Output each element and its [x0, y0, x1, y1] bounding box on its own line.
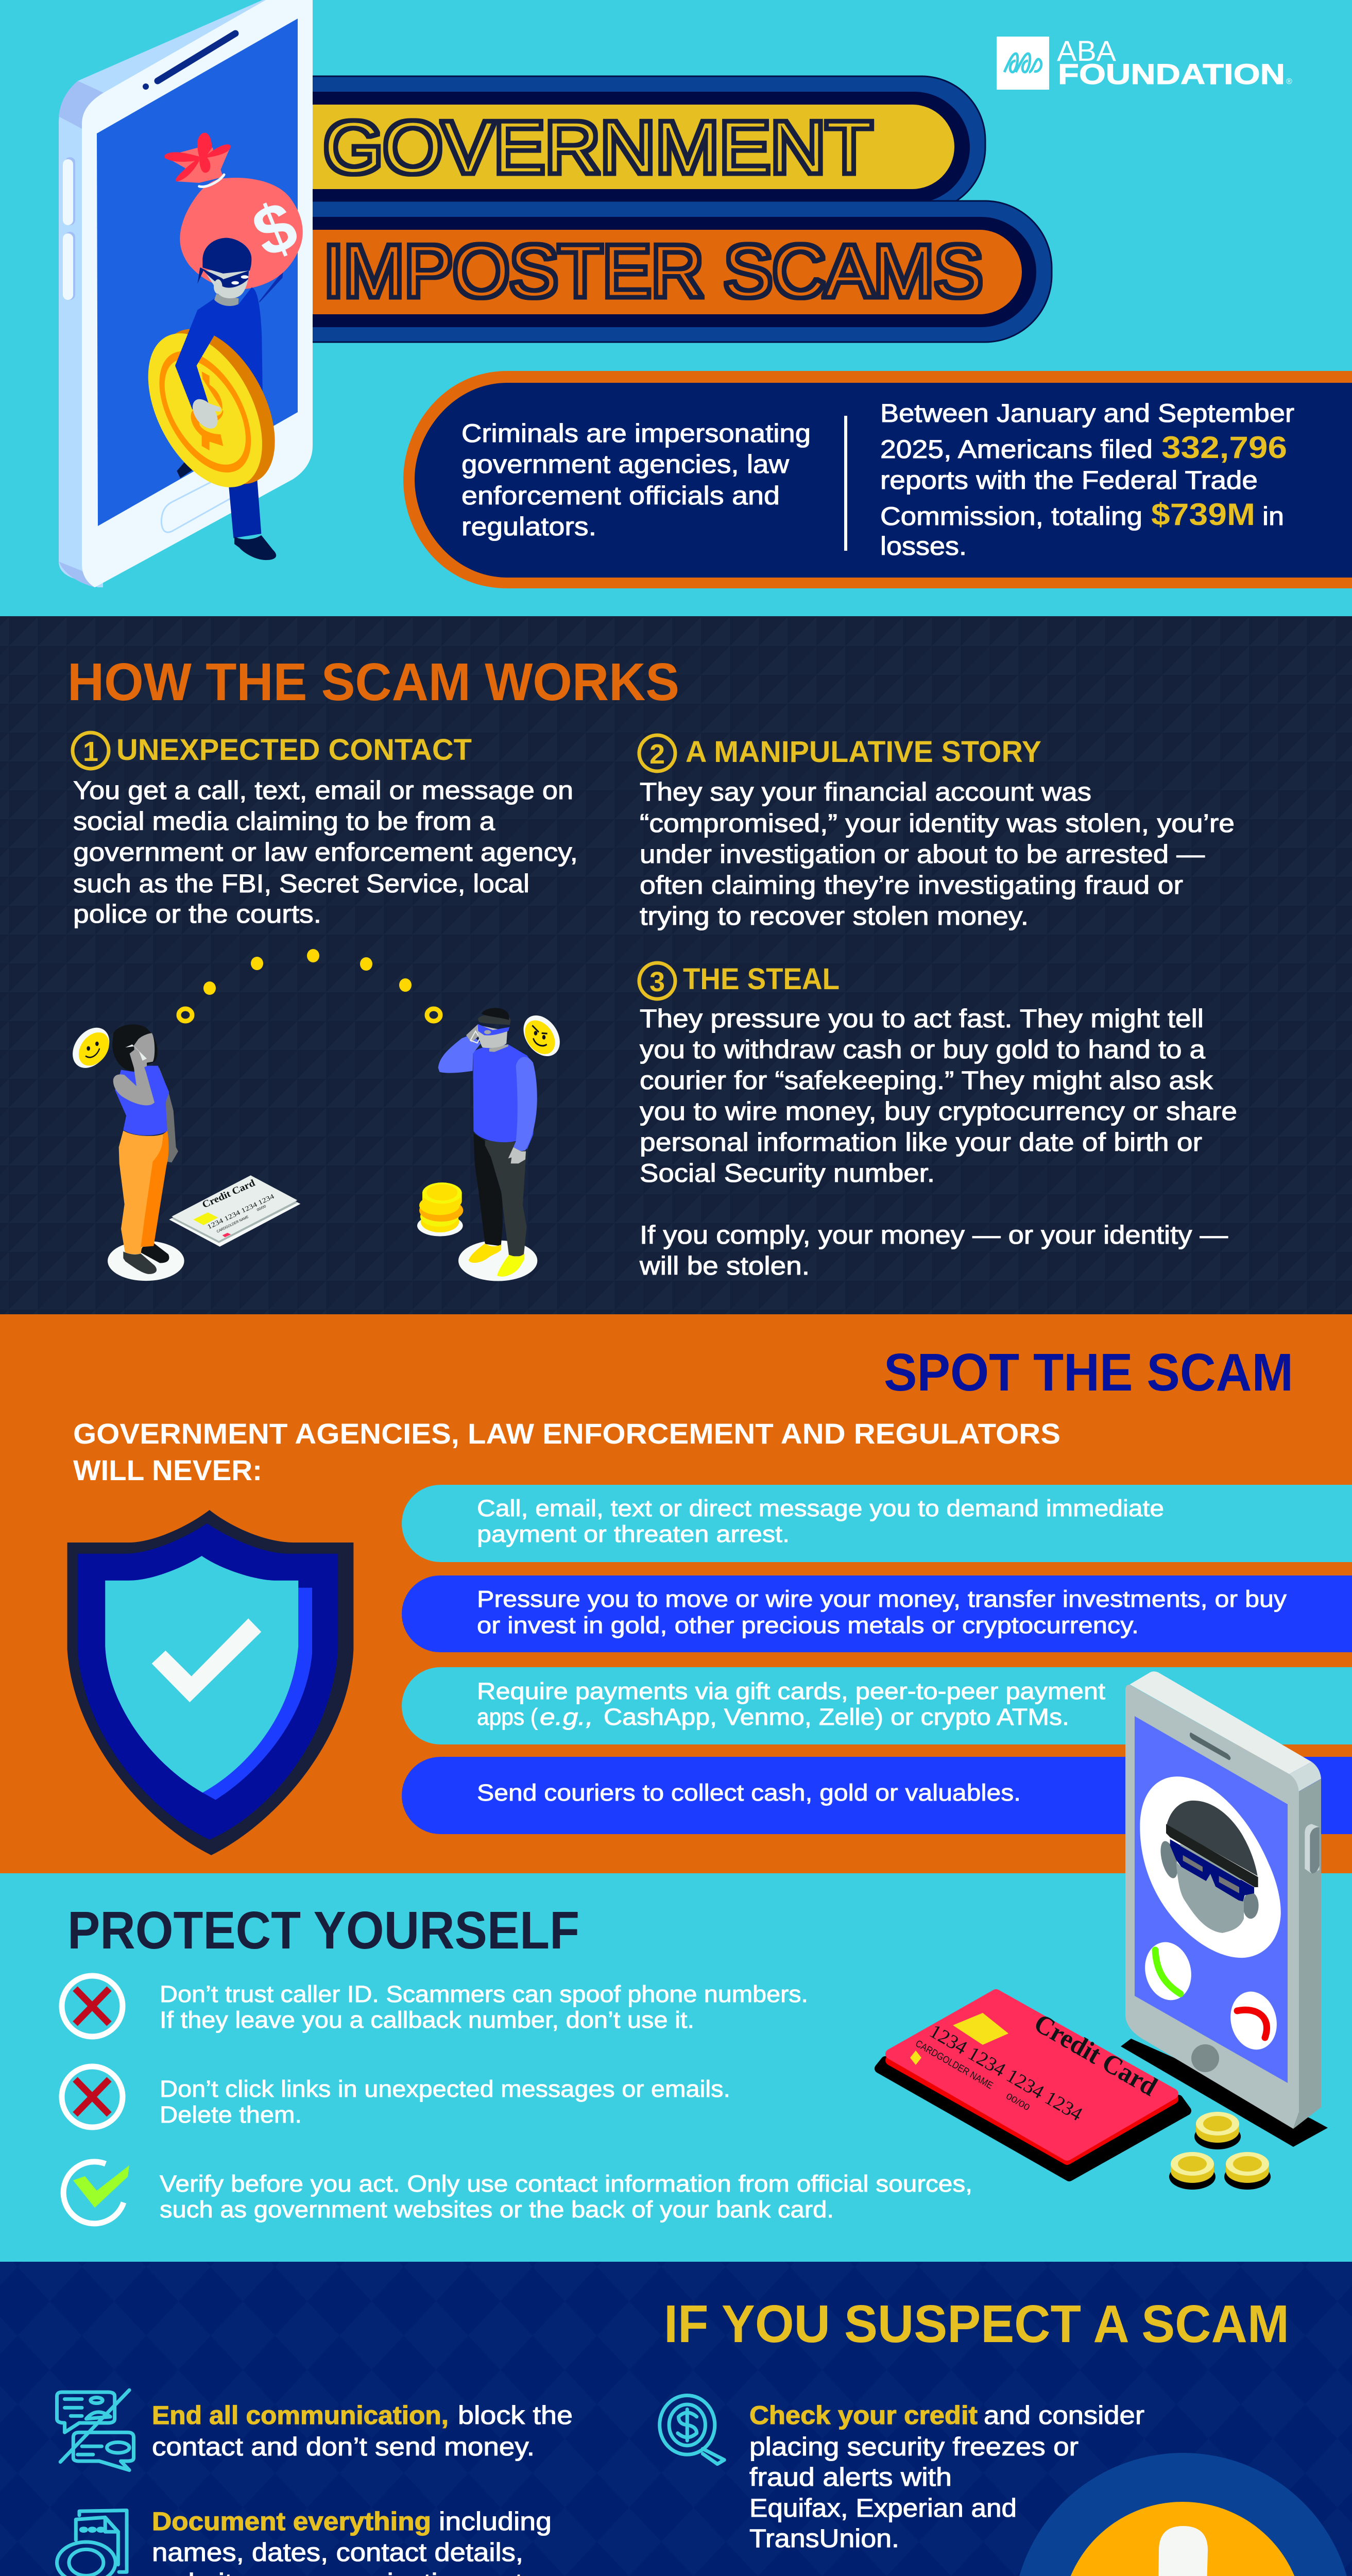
pill: call, email, text: Call, email, text or direct message you to demand immediate — [477, 1495, 1164, 1521]
pill: require payments: CashApp, Venmo, Zelle) or crypto ATMs. — [604, 1704, 1069, 1730]
text: statistics: 2025, Americans filed — [880, 435, 1153, 464]
illustration: magnifier with exclamation mark — [1013, 2453, 1352, 2576]
text: credit card details: 1234 1234 1234 1234 — [926, 2020, 1086, 2125]
text: document everything: Document everything — [152, 2507, 431, 2536]
step 3: the steal: you to wire money, buy cryptocurrency or share — [640, 1097, 1237, 1126]
pill: require payments: apps ( — [477, 1704, 538, 1730]
logo: ABA Foundation: FOUNDATION — [1058, 58, 1285, 90]
step 1: unexpected contact: government or law enforcement agency, — [73, 838, 578, 867]
logo: ABA Foundation: ABA — [1057, 35, 1117, 67]
text: statistics — [880, 399, 1294, 561]
text: check your credit: placing security freezes or — [749, 2432, 1079, 2461]
step 3: the steal: will be stolen. — [639, 1251, 810, 1280]
step 3: the steal: If you comply, your money — or your identity — — [640, 1221, 1228, 1249]
tip: caller ID: Don’t trust caller ID. Scammers can spoof phone numbers. — [160, 1981, 808, 2007]
step 3: the steal: courier for “safekeeping.” They might also ask — [640, 1066, 1213, 1095]
illustration: phone with thief — [59, 0, 313, 587]
text: credit card details: 00/00 — [1004, 2091, 1032, 2112]
text: intro: Criminals are impersonating — [461, 419, 811, 448]
step 2: a manipulative story: A MANIPULATIVE STORY — [686, 735, 1041, 769]
text: credit card labels — [200, 1177, 276, 1234]
tip: links: Delete them. — [160, 2102, 302, 2128]
tip: caller ID — [62, 1976, 808, 2037]
step 1: unexpected contact: UNEXPECTED CONTACT — [116, 733, 472, 767]
step 3: the steal: They pressure you to act fast. They might tell — [640, 1004, 1204, 1033]
text: document everything: including — [439, 2507, 552, 2536]
text: intro: government agencies, law — [461, 450, 790, 479]
pill: send couriers: Send couriers to collect cash, gold or valuables. — [477, 1780, 1021, 1806]
text: end all communication: End all communication, — [152, 2401, 449, 2430]
text: credit card labels: Credit Card — [200, 1177, 257, 1211]
step 3: the steal: 3 — [649, 967, 665, 997]
step 3: the steal: personal information like your date of birth or — [640, 1128, 1202, 1157]
illustration: gold coins — [1169, 2112, 1271, 2190]
section: protect yourself — [0, 1873, 1352, 2262]
step 3: the steal: THE STEAL — [683, 962, 840, 996]
illustration: woman on phone with credit card — [66, 1020, 300, 1281]
title banner: Government: GOVERNMENT — [323, 107, 872, 189]
icon: documents and magnifier — [57, 2511, 127, 2576]
tip: verify — [63, 2162, 972, 2224]
pill: pressure: Pressure you to move or wire your money, transfer investments, or buy — [477, 1586, 1287, 1612]
step 1: unexpected contact: You get a call, text, email or message on — [73, 776, 573, 805]
text: credit card details: CARDGOLDER NAME — [914, 2038, 995, 2091]
step 1: unexpected contact: 1 — [83, 736, 98, 767]
section: hero header — [0, 0, 1352, 616]
icon: blocked messages — [57, 2390, 133, 2470]
heading: if you suspect a scam: IF YOU SUSPECT A SCAM — [664, 2294, 1289, 2353]
tip: links — [62, 2066, 730, 2128]
pill: require payments — [402, 1667, 1352, 1744]
text: check your credit: fraud alerts with — [749, 2463, 952, 2492]
text: statistics: $739M — [1151, 497, 1255, 532]
tip: links: Don’t click links in unexpected messages or emails. — [160, 2076, 730, 2102]
step 2: a manipulative story — [639, 735, 1235, 930]
pill: call, email, text: payment or threaten arrest. — [477, 1521, 790, 1547]
logo: ABA Foundation: ® — [1286, 77, 1292, 86]
text: check your credit: Equifax, Experian and — [749, 2494, 1017, 2522]
text: statistics: losses. — [880, 532, 967, 561]
text: check your credit — [749, 2401, 1144, 2553]
heading: protect yourself: PROTECT YOURSELF — [67, 1901, 579, 1960]
tip: verify: such as government websites or the back of your bank card. — [160, 2196, 834, 2223]
tip: verify: Verify before you act. Only use contact information from official sources, — [160, 2171, 972, 2197]
step 2: a manipulative story: 2 — [649, 739, 665, 770]
step 2: a manipulative story: trying to recover stolen money. — [640, 902, 1029, 930]
illustration: phone with thief: $ — [242, 185, 307, 272]
text: end all communication: block the — [458, 2401, 573, 2430]
illustration: phone with incoming scam call — [1121, 1671, 1328, 2147]
text: statistics: reports with the Federal Trade — [880, 466, 1258, 495]
text: statistics: 332,796 — [1161, 430, 1287, 465]
text: statistics: Commission, totaling — [880, 502, 1142, 531]
section: how the scam works — [0, 616, 1352, 1314]
step 3: the steal: you to withdraw cash or buy gold to hand to a — [640, 1035, 1205, 1064]
text: document everything — [151, 2507, 552, 2576]
step 2: a manipulative story: under investigation or about to be arrested — — [640, 840, 1205, 869]
text: statistics: in — [1262, 502, 1284, 531]
text: document everything: names, dates, contact details, — [152, 2538, 523, 2567]
heading: how the scam works: HOW THE SCAM WORKS — [67, 652, 679, 711]
step 1: unexpected contact — [73, 733, 578, 928]
pill: pressure: or invest in gold, other precious metals or cryptocurrency. — [477, 1612, 1139, 1638]
step 3: the steal: Social Security number. — [640, 1159, 935, 1188]
subheading: will never — [73, 1417, 1060, 1486]
subheading: will never: WILL NEVER: — [73, 1454, 262, 1486]
pill: call, email, text — [402, 1485, 1352, 1562]
step 1: unexpected contact: police or the courts. — [73, 900, 321, 928]
text: end all communication — [152, 2401, 573, 2461]
section: if you suspect a scam — [0, 2262, 1352, 2576]
illustration: red credit card — [879, 1994, 1187, 2177]
step 2: a manipulative story: They say your financial account was — [640, 777, 1091, 806]
title banner: Government — [155, 76, 985, 211]
subheading: will never: GOVERNMENT AGENCIES, LAW ENFORCEMENT AND REGULATORS — [73, 1417, 1060, 1450]
title banner: Imposter Scams — [155, 201, 1052, 342]
pill: pressure — [402, 1575, 1352, 1652]
text: check your credit: Check your credit — [749, 2401, 978, 2430]
step 3: the steal — [639, 962, 1237, 1280]
title banner: Imposter Scams: IMPOSTER SCAMS — [323, 230, 983, 312]
pill: require payments: e.g., — [540, 1704, 593, 1730]
text: check your credit: TransUnion. — [749, 2524, 899, 2553]
section: spot the scam — [0, 1314, 1352, 1873]
icon: shield with check — [67, 1510, 353, 1855]
text: end all communication: contact and don’t send money. — [152, 2432, 535, 2461]
pill: require payments: Require payments via gift cards, peer-to-peer payment — [477, 1678, 1106, 1704]
step 1: unexpected contact: social media claiming to be from a — [73, 807, 495, 836]
tip: caller ID: If they leave you a callback number, don’t use it. — [160, 2007, 694, 2033]
illustration: scammer on phone with gold coins — [417, 1007, 567, 1281]
text: check your credit: and consider — [984, 2401, 1144, 2430]
text: credit card labels: CARDGOLDER NAME — [216, 1215, 249, 1234]
text: statistics: Between January and September — [880, 399, 1294, 428]
text: credit card labels: 00/00 — [256, 1205, 267, 1212]
illustration: dotted call arc — [179, 949, 440, 1021]
step 2: a manipulative story: “compromised,” your identity was stolen, you’re — [640, 809, 1235, 838]
step 1: unexpected contact: such as the FBI, Secret Service, local — [73, 869, 529, 898]
text: intro — [461, 419, 811, 541]
icon: dollar magnifier — [660, 2395, 724, 2464]
text: intro: regulators. — [461, 512, 596, 541]
pill: send couriers — [402, 1757, 1352, 1834]
text: credit card details: Credit Card — [1029, 2008, 1162, 2102]
step 2: a manipulative story: often claiming they’re investigating fraud or — [640, 871, 1183, 900]
text: credit card labels: 1234 1234 1234 1234 — [206, 1192, 276, 1231]
logo: ABA Foundation — [997, 35, 1292, 90]
heading: spot the scam: SPOT THE SCAM — [884, 1343, 1293, 1402]
panel: intro and statistics — [403, 371, 1352, 588]
text: credit card details — [914, 2008, 1162, 2125]
text: intro: enforcement officials and — [461, 481, 780, 510]
